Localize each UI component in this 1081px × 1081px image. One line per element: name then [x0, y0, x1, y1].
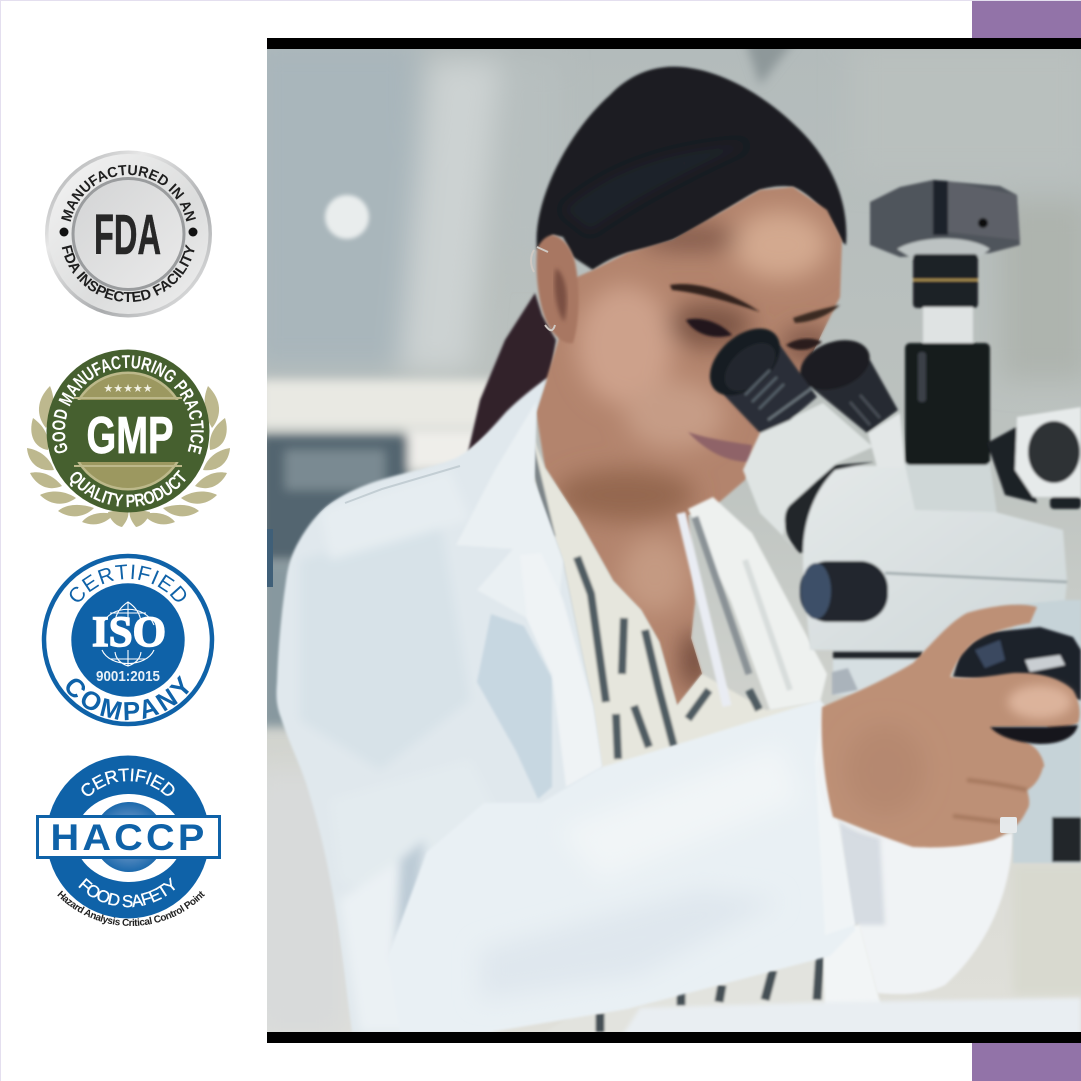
ISO wordmark: ISO [92, 609, 166, 656]
banner [38, 816, 220, 858]
arc text top: CERTIFIED [70, 564, 186, 602]
hand [822, 605, 1080, 847]
arc text bottom: COMPANY [66, 675, 189, 720]
GMP wordmark: GMP [86, 407, 174, 465]
silver column [923, 307, 973, 344]
accent: top purple block [972, 0, 1081, 38]
side camera [987, 407, 1081, 509]
globe [102, 602, 154, 666]
dark gap in housing [785, 462, 875, 553]
frame: top black bar [267, 38, 1081, 49]
knob behind hand [953, 627, 1081, 700]
eyepiece right [793, 331, 898, 433]
FDA wordmark: FDA [94, 203, 161, 267]
stars: ★★★★★ [103, 383, 153, 395]
camera head [870, 180, 1020, 260]
panel: laboratory photo [250, 40, 1081, 1040]
lower column [1013, 600, 1081, 863]
arc text top: GOOD MANUFACTURING PRACTICE [52, 355, 204, 454]
column dark block [1052, 817, 1081, 862]
accent: bottom purple block [972, 1043, 1081, 1081]
right coat panel [681, 497, 827, 710]
hair [536, 67, 846, 270]
blouse [534, 444, 800, 766]
photo background: blurred laboratory [250, 40, 1081, 1040]
knob under fingers [990, 725, 1078, 744]
body seam [885, 573, 1067, 582]
arc text top: MANUFACTURED IN AN [61, 164, 196, 222]
column slot [918, 352, 926, 402]
skin shading [555, 211, 834, 690]
eyebrow right [793, 305, 840, 323]
shoulder seam [345, 466, 460, 503]
chrome fitting [832, 668, 858, 695]
blouse lower panel with stripes [545, 945, 830, 1032]
badge: FDA [45, 150, 212, 318]
main body [803, 465, 1067, 650]
arc text bottom: FOOD SAFETY [78, 877, 176, 908]
hanging sleeve cuff [837, 815, 1013, 994]
sleeve cuff right edge [815, 705, 855, 935]
face and neck [531, 187, 842, 706]
ear shadow [554, 268, 567, 322]
sleeve over scope [388, 700, 855, 1032]
lips [688, 432, 752, 462]
black ring with gold line [913, 254, 978, 308]
arc text bottom: QUALITY PRODUCT [70, 470, 186, 508]
eyebrow left [670, 284, 760, 312]
green band [67, 400, 189, 462]
arc text bottom: FDA INSPECTED FACILITY [62, 244, 194, 302]
tube housing left [743, 403, 873, 553]
standard number: 9001:2015 [96, 668, 160, 685]
tagline: Hazard Analysis Critical Control Point [57, 890, 205, 926]
badge: GMP [27, 350, 230, 527]
table edge [622, 998, 1081, 1036]
badge: ISO [42, 554, 214, 726]
eye right [786, 339, 822, 350]
HACCP wordmark: HACCP [50, 817, 208, 858]
earrings [531, 247, 555, 330]
ear [537, 235, 579, 343]
lab coat [276, 378, 602, 1032]
ring [1000, 817, 1017, 833]
arc text top: CERTIFIED [81, 768, 174, 796]
eyepiece left [708, 326, 818, 434]
microscope [697, 180, 1081, 863]
coat strip below sleeve [823, 925, 882, 1010]
coat folds [306, 499, 462, 1029]
badge: HACCP [36, 756, 221, 926]
lapel fold [459, 408, 563, 615]
frame: bottom black bar [267, 1032, 1081, 1043]
shaded inner coat [477, 614, 552, 799]
black column [905, 343, 990, 465]
laurel wreath [27, 386, 230, 527]
tube right [868, 413, 905, 467]
right lapel strip [552, 596, 602, 786]
focus knob [800, 561, 888, 622]
ponytail [468, 293, 556, 452]
eye left [686, 319, 732, 337]
dark ledge [833, 651, 923, 659]
base under body [833, 650, 943, 695]
camera collar foot [905, 463, 997, 515]
